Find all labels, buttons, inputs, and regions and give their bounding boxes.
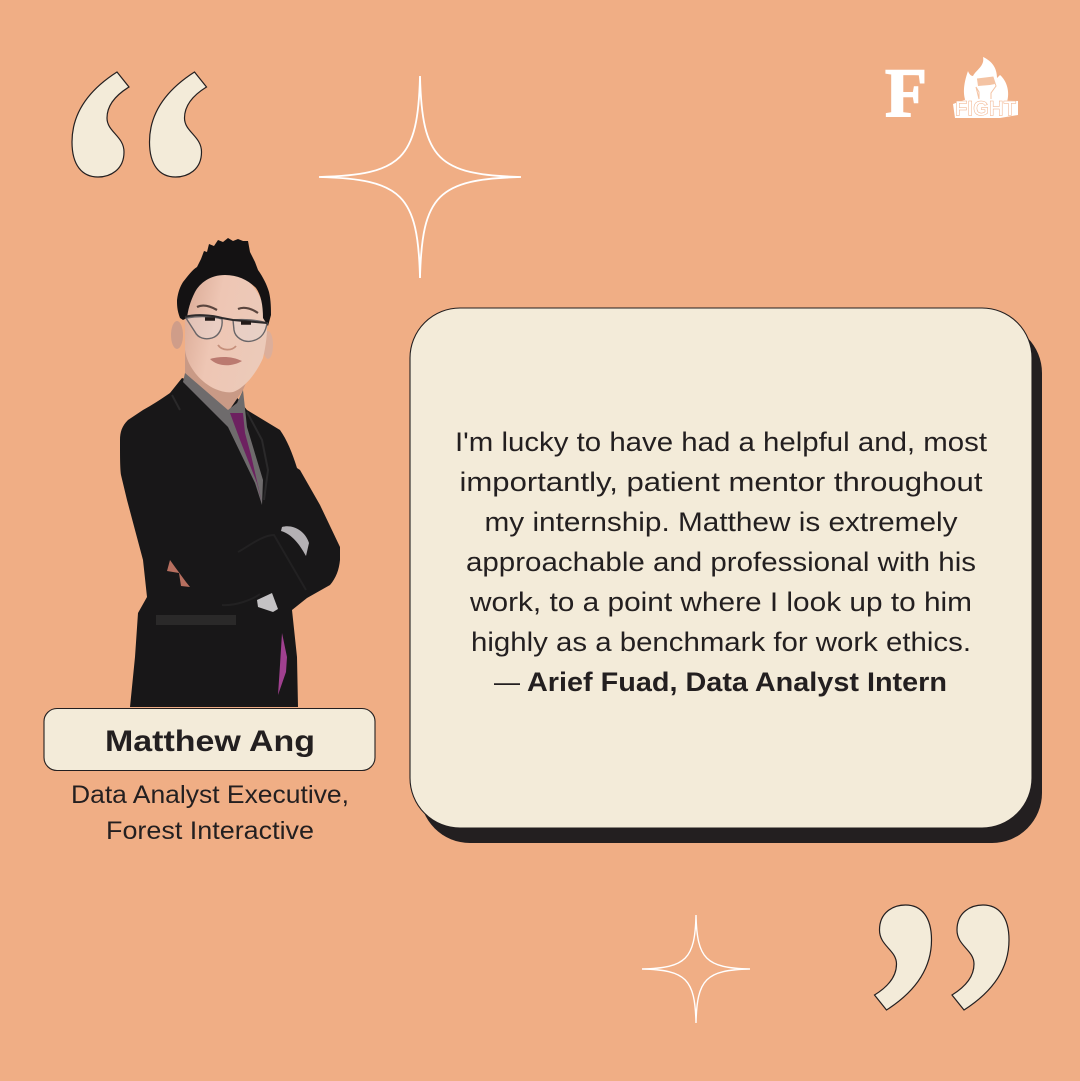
testimonial text: approachable and professional with his <box>466 547 976 577</box>
photo: Matthew Ang in a black suit <box>120 238 340 707</box>
name plate <box>44 708 375 770</box>
face <box>185 274 267 392</box>
lapel line <box>172 395 268 500</box>
icon: large sparkle star <box>319 76 521 278</box>
quote card drop shadow <box>420 323 1042 843</box>
glasses <box>185 315 267 341</box>
necktie upper <box>230 413 262 503</box>
necktie lower <box>278 633 287 695</box>
eyes <box>205 319 251 323</box>
pocket <box>156 615 236 625</box>
icon: opening quotation marks <box>72 72 206 177</box>
neck <box>185 345 262 412</box>
jacket <box>120 378 340 707</box>
ear right <box>263 331 273 359</box>
eyebrows <box>197 306 258 313</box>
nose <box>218 345 236 350</box>
testimonial text <box>455 427 988 697</box>
testimonial text: — <box>494 667 520 697</box>
name plate: Matthew Ang <box>105 725 315 758</box>
job title text: Forest Interactive <box>106 817 314 845</box>
testimonial text: Arief Fuad, Data Analyst Intern <box>527 667 947 697</box>
job title text <box>71 781 349 845</box>
testimonial text: my internship. Matthew is extremely <box>484 507 958 537</box>
job title text: Data Analyst Executive, <box>71 781 349 809</box>
lips <box>210 357 242 365</box>
ear left <box>171 321 183 349</box>
testimonial text: importantly, patient mentor throughout <box>460 467 983 497</box>
testimonial text: I'm lucky to have had a helpful and, most <box>455 427 988 457</box>
testimonial text: work, to a point where I look up to him <box>469 587 972 617</box>
icon: small sparkle star <box>642 915 750 1023</box>
hand <box>167 560 190 587</box>
lower shirt cuff <box>257 593 278 612</box>
icon: closing quotation marks <box>874 905 1009 1010</box>
hair <box>177 238 271 326</box>
quote card <box>410 308 1032 828</box>
shirt cuff <box>281 526 309 556</box>
logo: FIGHT flame and fist: FIGHT <box>955 98 1016 120</box>
testimonial text: highly as a benchmark for work ethics. <box>471 627 971 657</box>
shirt collar and front <box>183 373 263 505</box>
logo: F: F <box>885 55 927 132</box>
logo: FIGHT flame and fist <box>953 57 1018 120</box>
sleeve fold <box>222 535 306 605</box>
